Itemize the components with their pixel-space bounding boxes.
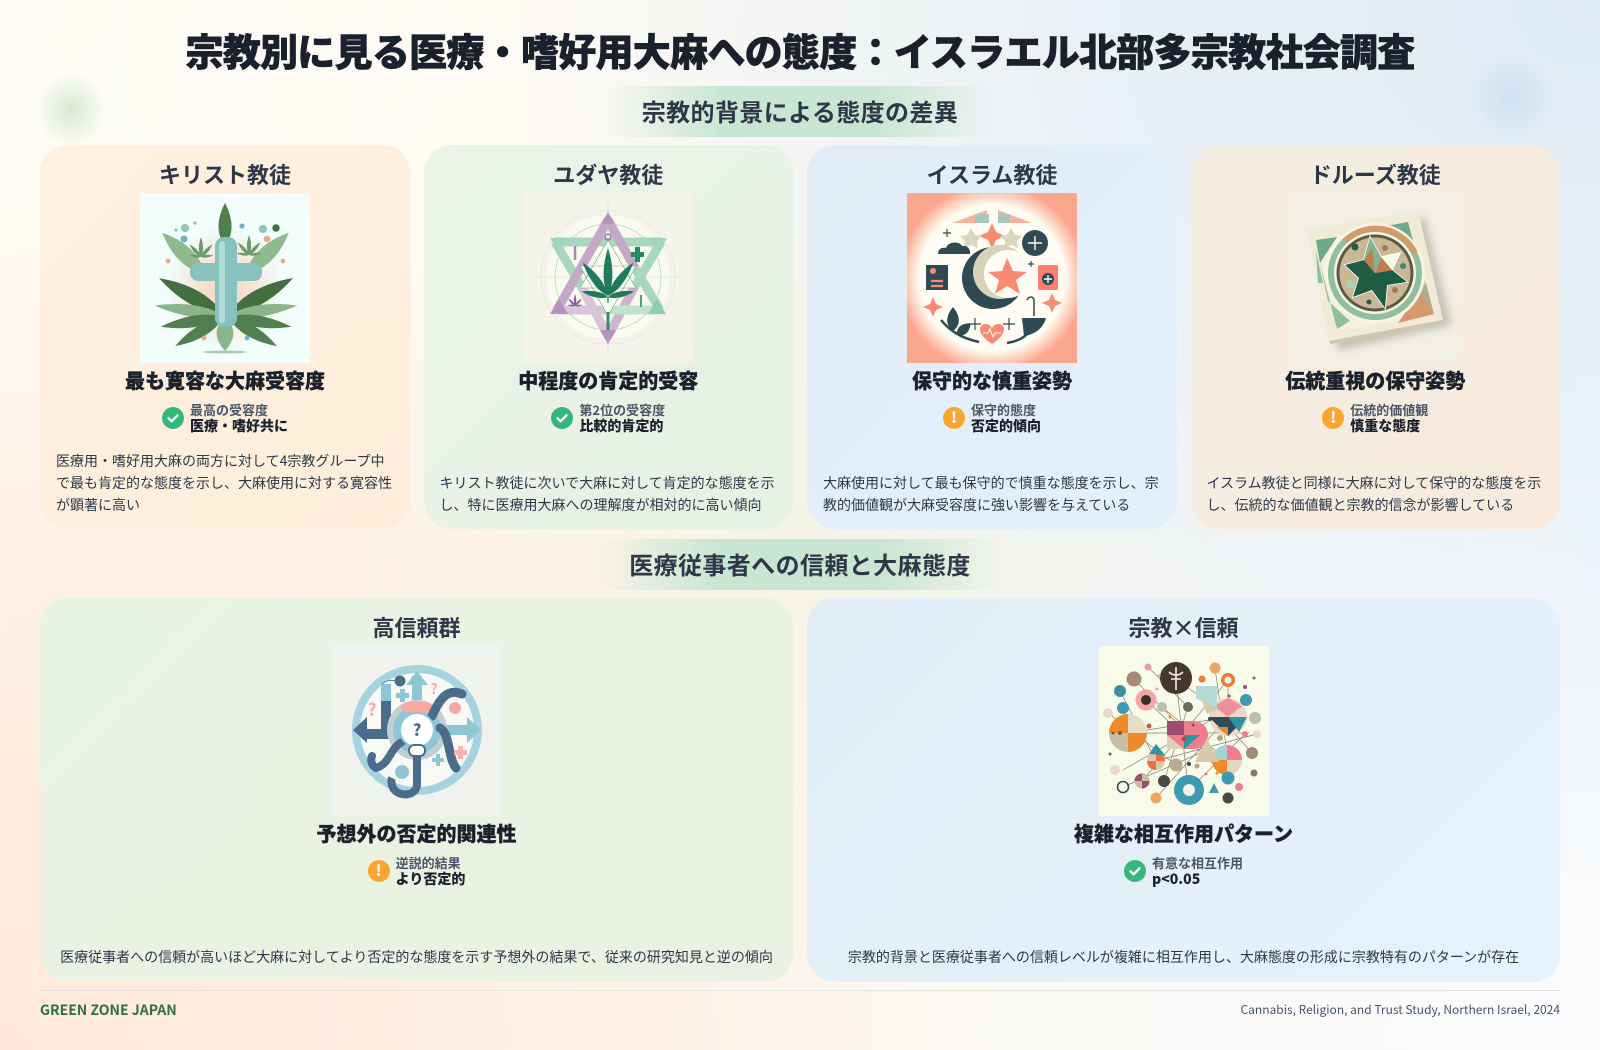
icon: check — [1124, 860, 1146, 882]
description: 宗教的背景と医療従事者への信頼レベルが複雑に相互作用し、大麻態度の形成に宗教特有のパターンが存在 — [848, 947, 1519, 967]
icon: check — [162, 407, 184, 429]
heading: Christians: キリスト教徒 — [159, 158, 291, 190]
status badge — [551, 400, 665, 436]
icon: warning — [943, 407, 965, 429]
icon: warning — [368, 860, 390, 882]
description: 医療用・嗜好用大麻の両方に対して4宗教グループ中 — [56, 451, 385, 471]
badge text: より否定的 — [396, 869, 465, 889]
description — [1206, 473, 1541, 515]
image: stethoscope and arrows: ? — [430, 679, 438, 699]
headline: 最も寛容な大麻受容度 — [125, 365, 325, 394]
headline: 保守的な慎重姿勢 — [912, 365, 1072, 394]
description: で最も肯定的な態度を示し、大麻使用に対する寛容性 — [56, 473, 392, 493]
description — [823, 473, 1159, 515]
badge text: 有意な相互作用 — [1152, 853, 1243, 872]
heading: Druze: ドルーズ教徒 — [1310, 158, 1441, 190]
image: stethoscope and arrows: ? — [413, 717, 421, 741]
status badge — [368, 853, 465, 889]
description — [440, 473, 775, 515]
badge text: 否定的傾向 — [971, 416, 1041, 436]
section heading: religious background — [607, 86, 993, 137]
icon: warning: ! — [1330, 407, 1336, 428]
panel: Druze — [1190, 145, 1560, 529]
image: stethoscope and arrows: ? — [368, 696, 376, 721]
image: cross and cannabis leaves — [140, 193, 310, 363]
image: crescent and star — [907, 193, 1077, 363]
image: ornate book with star — [1308, 211, 1456, 354]
badge text — [1350, 400, 1428, 436]
badge text: 医療・嗜好共に — [190, 416, 288, 436]
badge text — [1152, 853, 1243, 889]
decorative glow: green — [36, 72, 106, 148]
badge text: p<0.05 — [1152, 869, 1200, 889]
decorative glow: blue — [1468, 55, 1554, 141]
heading: religion and trust: 宗教×信頼 — [1128, 611, 1238, 643]
heading: Jews: ユダヤ教徒 — [553, 158, 663, 190]
panel: religion and trust — [807, 598, 1560, 982]
badge text — [190, 400, 288, 436]
footer source: Cannabis, Religion, and Trust Study, Northern Israel, 2024 — [1240, 1001, 1560, 1018]
description: 大麻使用に対して最も保守的で慎重な態度を示し、宗 — [823, 473, 1159, 493]
badge text: 第2位の受容度 — [579, 400, 665, 419]
panel: Jews — [424, 145, 793, 529]
description: イスラム教徒と同様に大麻に対して保守的な態度を示 — [1206, 473, 1541, 493]
image: interaction network — [1099, 646, 1269, 816]
title: 宗教別に見る医療・嗜好用大麻への態度：イスラエル北部多宗教社会調査 — [185, 22, 1415, 77]
badge text: 最高の受容度 — [190, 400, 268, 419]
badge text: 逆説的結果 — [396, 853, 461, 872]
section heading: trust in healthcare workers — [597, 539, 1003, 590]
icon: warning — [1322, 407, 1344, 429]
description: キリスト教徒に次いで大麻に対して肯定的な態度を示 — [440, 473, 775, 493]
badge text: 保守的態度 — [971, 400, 1036, 419]
description: が顕著に高い — [56, 495, 140, 515]
badge text: 慎重な態度 — [1350, 416, 1420, 436]
headline: 伝統重視の保守姿勢 — [1285, 365, 1465, 394]
headline: 複雑な相互作用パターン — [1074, 818, 1293, 847]
status badge — [1322, 400, 1428, 436]
description: 医療従事者への信頼が高いほど大麻に対してより否定的な態度を示す予想外の結果で、従来の研究知見と逆の傾向 — [60, 947, 773, 967]
description: し、特に医療用大麻への理解度が相対的に高い傾向 — [440, 495, 762, 515]
badge text — [579, 400, 665, 436]
status badge — [1124, 853, 1243, 889]
headline: 中程度の肯定的受容 — [518, 365, 698, 394]
icon: warning: ! — [376, 860, 382, 881]
panel: high-trust group — [40, 598, 793, 982]
badge text: 伝統的価値観 — [1350, 400, 1428, 419]
status badge — [162, 400, 288, 436]
icon: check — [551, 407, 573, 429]
badge text: 比較的肯定的 — [579, 416, 663, 436]
heading: Muslims: イスラム教徒 — [927, 158, 1057, 190]
panel: Christians — [40, 145, 410, 529]
status badge — [943, 400, 1041, 436]
heading: high-trust group: 高信頼群 — [372, 611, 460, 643]
badge text — [396, 853, 465, 889]
section heading: trust in healthcare workers: 医療従事者への信頼と大麻態度 — [629, 546, 971, 581]
section heading: religious background: 宗教的背景による態度の差異 — [642, 93, 958, 128]
description — [56, 451, 392, 515]
headline: 予想外の否定的関連性 — [316, 818, 516, 847]
description: 教的価値観が大麻受容度に強い影響を与えている — [823, 495, 1130, 515]
image: stethoscope and arrows — [332, 646, 502, 816]
icon: warning: ! — [951, 407, 957, 428]
footer brand: GREEN ZONE JAPAN — [40, 1000, 177, 1020]
badge text — [971, 400, 1041, 436]
description: し、伝統的な価値観と宗教的信念が影響している — [1206, 495, 1514, 515]
panel: Muslims — [807, 145, 1177, 529]
image: star of David with leaf — [523, 193, 693, 363]
